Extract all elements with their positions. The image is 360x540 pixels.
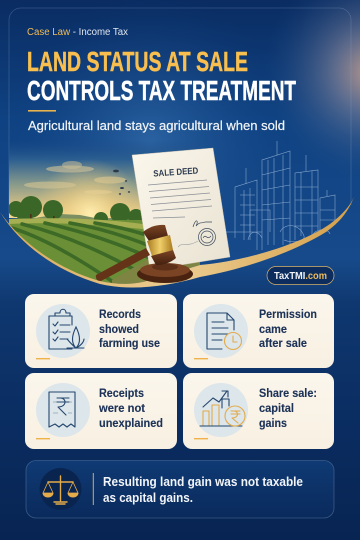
category label: Case Law - Income Tax bbox=[27, 27, 128, 38]
birds bbox=[113, 170, 130, 195]
card text: came bbox=[259, 322, 287, 336]
card: permission came after sale bbox=[183, 294, 334, 368]
card text: farming use bbox=[99, 336, 160, 350]
title rule bbox=[28, 110, 56, 112]
signature and seal bbox=[178, 221, 216, 247]
header: category, title and subtitle bbox=[27, 27, 296, 133]
icon: clipboard with plant bbox=[36, 304, 90, 358]
accent dash bbox=[36, 358, 50, 359]
conclusion text: as capital gains. bbox=[103, 491, 193, 505]
card text: Records bbox=[99, 307, 141, 321]
card text: were not bbox=[98, 401, 145, 415]
accent dash bbox=[36, 438, 50, 439]
accent dash bbox=[194, 438, 208, 439]
icon: document with clock bbox=[194, 304, 248, 358]
card text: Permission bbox=[259, 307, 317, 321]
card text: Receipts bbox=[99, 386, 144, 400]
card: receipts were not unexplained bbox=[25, 373, 177, 449]
divider bbox=[93, 473, 94, 505]
TaxTMI badge: TaxTMI.com bbox=[274, 271, 327, 282]
header frame bbox=[9, 8, 351, 215]
card: share sale capital gains bbox=[183, 373, 334, 449]
conclusion text: Resulting land gain was not taxable bbox=[103, 475, 303, 489]
card text: capital bbox=[259, 401, 294, 415]
icon: bar chart with rupee coin bbox=[194, 383, 248, 437]
card text: unexplained bbox=[99, 416, 163, 430]
card: records showed farming use bbox=[25, 294, 177, 368]
document heading: SALE DEED bbox=[153, 165, 199, 179]
TaxTMI badge bbox=[267, 266, 334, 284]
card text: gains bbox=[259, 416, 287, 430]
conclusion panel bbox=[26, 460, 334, 518]
accent dash bbox=[194, 358, 208, 359]
card text: Share sale: bbox=[259, 386, 317, 400]
icon: rupee receipt bbox=[36, 383, 90, 437]
icon: scales of justice bbox=[40, 468, 82, 510]
hero illustration: blueprint city bbox=[226, 141, 335, 250]
title line 1: LAND STATUS AT SALE bbox=[27, 46, 248, 77]
gavel bbox=[96, 225, 193, 283]
card text: after sale bbox=[259, 336, 307, 350]
sale deed document bbox=[132, 148, 230, 270]
subtitle: Agricultural land stays agricultural when sold bbox=[28, 119, 285, 133]
gold swoosh bbox=[0, 197, 354, 288]
card text: showed bbox=[99, 322, 139, 336]
hero illustration: farmland bbox=[9, 147, 200, 284]
